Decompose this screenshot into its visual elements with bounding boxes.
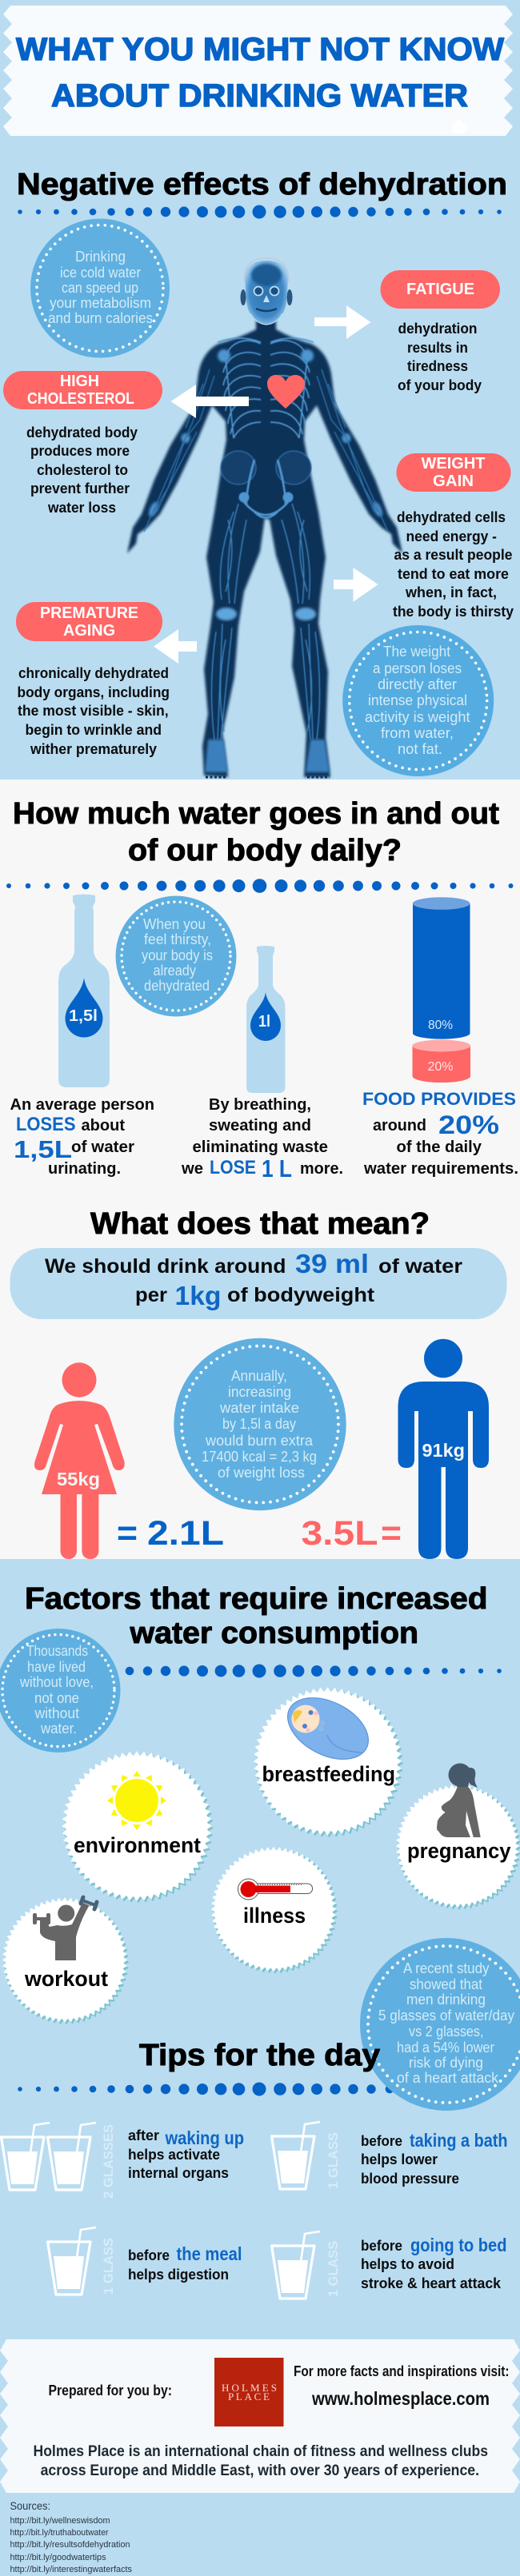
- pill: premature aging: AGING: [63, 622, 115, 640]
- white section background: [0, 780, 520, 1559]
- text: high cholesterol: water loss: [47, 500, 116, 516]
- text: 1 l breathing: eliminating waste: [192, 1138, 328, 1156]
- text: 1 l breathing: we: [181, 1160, 203, 1178]
- tip: taking a bath: 1 GLASS: [326, 2132, 341, 2189]
- factor: breastfeeding: breastfeeding: [262, 1762, 395, 1786]
- footer banner: Prepared for you by:: [48, 2383, 172, 2399]
- callout: ice cold water: [30, 219, 170, 358]
- stat: 3.5 l: 3.5L: [301, 1514, 378, 1553]
- spine: [262, 326, 269, 477]
- stat: 3.5 l: [301, 1513, 402, 1553]
- arrow: to premature aging: [154, 629, 197, 664]
- arrow: to high cholesterol: [171, 385, 249, 418]
- pill: high cholesterol: CHOLESTEROL: [27, 390, 134, 408]
- callout: recent study: showed that: [410, 1976, 482, 1992]
- callout: annual burn: increasing: [228, 1384, 291, 1400]
- dotted divider 1: [18, 205, 502, 219]
- icon: small bottle 1 l: [246, 946, 285, 1093]
- panel: 39 ml per kg: of bodyweight: [227, 1284, 375, 1306]
- dotted divider 4: [18, 2082, 502, 2096]
- factor: breastfeeding: [238, 1673, 418, 1852]
- text: food provides: FOOD PROVIDES: [362, 1089, 516, 1109]
- text: 1.5 l urinating: [10, 1096, 154, 1178]
- tip: going to bed: stroke & heart attack: [361, 2275, 502, 2291]
- callout: weight from water: not fat.: [398, 741, 442, 757]
- icon: woman 55 kg: 55kg: [57, 1469, 100, 1489]
- tip: going to bed: going to bed: [410, 2235, 507, 2255]
- text: 1 l breathing: sweating and: [209, 1117, 311, 1134]
- text: food provides: of the daily: [397, 1138, 482, 1156]
- tip: taking a bath: [272, 2122, 507, 2189]
- x-ray human body: [127, 258, 402, 777]
- leg bones and veins: [211, 504, 320, 740]
- factor: workout: [0, 1885, 142, 2037]
- text: 1.5 l urinating: about: [82, 1117, 125, 1134]
- icon: glass: [272, 2122, 320, 2189]
- factor: illness: [198, 1834, 350, 1986]
- icon: person lifting dumbbells: [33, 1897, 98, 1960]
- text: weight gain: as a result people: [394, 547, 512, 563]
- callout: recent study: 5 glasses of water/day: [378, 2008, 514, 2024]
- callout: thirsty: your body is: [142, 947, 213, 963]
- callout: recent study: men drinking: [406, 1992, 486, 2008]
- callout: recent study: risk of dying: [409, 2055, 483, 2071]
- tip: before the meal: helps digestion: [128, 2267, 229, 2283]
- callout: ice cold water: ice cold water: [60, 265, 141, 281]
- heading: factors: [25, 1582, 488, 1650]
- text: high cholesterol: cholesterol to: [37, 462, 128, 478]
- text: premature aging: the most visible - skin,: [18, 703, 169, 719]
- text: 1.5 l urinating: urinating.: [48, 1160, 121, 1178]
- icon: man 91 kg: [398, 1339, 489, 1559]
- tip: going to bed: 1 GLASS: [326, 2241, 341, 2297]
- callout: thousands without love: without: [34, 1705, 79, 1721]
- text: 1 l breathing: 1 L: [262, 1154, 292, 1182]
- text: 1 l breathing: LOSE: [210, 1157, 256, 1178]
- body silhouette: [127, 320, 402, 777]
- title banner: WHAT YOU MIGHT NOT KNOW: [16, 32, 504, 67]
- tip: taking a bath: before: [361, 2133, 402, 2149]
- callout: ice cold water: can speed up: [62, 280, 138, 296]
- callout: thousands without love: not one: [34, 1690, 79, 1706]
- arm veins: [144, 369, 388, 532]
- text: premature aging: begin to wrinkle and: [26, 722, 162, 738]
- stat: 2.1 l: =: [117, 1513, 138, 1553]
- callout: annual burn: 17400 kcal = 2,3 kg: [202, 1449, 317, 1465]
- heading: how much water: How much water goes in and out: [13, 797, 499, 831]
- tip: waking up: helps activate: [128, 2147, 220, 2163]
- panel: 39 ml per kg: We should drink around: [45, 1255, 286, 1278]
- heading: how much water: [13, 797, 499, 867]
- text: fatigue: of your body: [398, 377, 482, 393]
- icon: glass: [272, 2231, 320, 2299]
- icon: heart: [267, 375, 305, 409]
- callout: weight from water: [342, 625, 494, 776]
- tip: waking up: [2, 2123, 244, 2199]
- icon: large bottle 1.5 l: [58, 894, 110, 1087]
- tip: waking up: after: [128, 2127, 159, 2143]
- callout: thousands without love: Thousands: [26, 1643, 88, 1659]
- pill: premature aging: PREMATURE: [40, 604, 138, 622]
- icon: sun: [107, 1771, 166, 1830]
- text: 1 l breathing: By breathing,: [209, 1096, 311, 1114]
- callout: thirsty: already: [154, 963, 196, 979]
- text: weight gain: the body is thirsty: [393, 604, 514, 620]
- icon: two glasses: [2, 2123, 96, 2190]
- panel: 39 ml per kg: 1kg: [174, 1281, 221, 1310]
- pill: weight gain: GAIN: [433, 473, 474, 490]
- callout: recent study: had a 54% lower: [397, 2040, 494, 2056]
- chart: 80 / 20 cylinder: 20%: [427, 1060, 453, 1074]
- factor: pregnancy: [383, 1764, 520, 1922]
- text: 1.5 l urinating: An average person: [10, 1096, 154, 1114]
- callout: annual burn: water intake: [219, 1400, 299, 1416]
- logo: holmes place: [214, 2358, 283, 2426]
- text: high cholesterol: [26, 425, 138, 516]
- callout: annual burn: would burn extra: [205, 1433, 314, 1449]
- sources: http://bit.ly/goodwatertips: [10, 2553, 106, 2562]
- sources: http://bit.ly/resultsofdehydration: [10, 2540, 130, 2550]
- heading: factors: water consumption: [129, 1617, 418, 1650]
- title banner: [3, 6, 513, 136]
- callout: thousands without love: without love,: [19, 1674, 94, 1690]
- text: 1 l breathing: more.: [300, 1160, 343, 1178]
- callout: thirsty: dehydrated: [144, 978, 210, 994]
- sources: Sources:: [10, 2499, 50, 2512]
- callout: recent study: [360, 1938, 520, 2111]
- text: food provides: water requirements.: [363, 1160, 518, 1178]
- tip: before the meal: the meal: [176, 2243, 242, 2264]
- text: high cholesterol: prevent further: [30, 481, 130, 496]
- title banner: ABOUT DRINKING WATER: [51, 78, 468, 114]
- icon: man 91 kg: 91kg: [422, 1440, 465, 1461]
- heading: tips for the day: Tips for the day: [139, 2039, 380, 2072]
- dotted divider 3: [125, 1665, 502, 1677]
- tip: taking a bath: blood pressure: [361, 2171, 459, 2187]
- icon: swaddled baby: [278, 1685, 378, 1772]
- text: fatigue: results in: [407, 340, 468, 356]
- arrow: to fatigue: [314, 305, 371, 339]
- text: 1.5 l urinating: of water: [71, 1138, 134, 1156]
- callout: thousands without love: have lived: [27, 1659, 86, 1675]
- callout: annual burn: [174, 1338, 346, 1510]
- text: food provides: [362, 1089, 518, 1178]
- callout: weight from water: activity is weight: [365, 709, 470, 725]
- text: premature aging: body organs, including: [18, 684, 170, 700]
- text: fatigue: [398, 321, 482, 393]
- icon: woman 55 kg: [34, 1362, 125, 1559]
- icon: pregnant silhouette: [437, 1764, 481, 1837]
- callout: weight from water: a person loses: [373, 660, 462, 676]
- text: fatigue: dehydration: [398, 321, 477, 337]
- footer banner: [0, 2339, 520, 2493]
- sources: http://bit.ly/wellneswisdom: [10, 2516, 110, 2526]
- logo: holmes place: HOLMES: [222, 2382, 277, 2394]
- tip: taking a bath: taking a bath: [410, 2130, 507, 2151]
- sources: http://bit.ly/truthaboutwater: [10, 2528, 109, 2538]
- logo: holmes place: PLACE: [228, 2391, 270, 2403]
- text: food provides: 20%: [438, 1111, 499, 1139]
- text: 1.5 l urinating: LOSES: [16, 1114, 75, 1135]
- text: high cholesterol: dehydrated body: [26, 425, 138, 441]
- pill: premature aging: [16, 602, 162, 641]
- tip: waking up: 2 GLASSES: [101, 2124, 116, 2199]
- pill: high cholesterol: HIGH: [60, 373, 99, 390]
- text: high cholesterol: produces more: [30, 443, 130, 459]
- callout: annual burn: Annually,: [231, 1368, 287, 1384]
- heading: factors: Factors that require increased: [25, 1582, 488, 1616]
- callout: weight from water: intense physical: [368, 692, 467, 708]
- pill: weight gain: [397, 453, 510, 492]
- sources: http://bit.ly/interestingwaterfacts: [10, 2565, 132, 2574]
- factor: illness: illness: [243, 1904, 306, 1928]
- feet: [205, 740, 330, 772]
- tip: going to bed: helps to avoid: [361, 2256, 454, 2272]
- footer banner: www.holmesplace.com: [311, 2388, 490, 2409]
- heading: how much water: of our body daily?: [128, 834, 402, 867]
- pill: weight gain: WEIGHT: [421, 455, 485, 473]
- panel: 39 ml per kg: 39 ml: [295, 1249, 369, 1278]
- factor: environment: [46, 1736, 229, 1918]
- panel: 39 ml per kg: of water: [378, 1255, 462, 1278]
- footer banner: Holmes Place is an international chain of fitness and wellness clubs: [34, 2443, 488, 2460]
- text: fatigue: tiredness: [407, 358, 468, 374]
- callout: thousands without love: [0, 1629, 120, 1753]
- callout: recent study: A recent study: [403, 1960, 490, 1976]
- text: weight gain: need energy -: [406, 528, 497, 544]
- callout: weight from water: The weight: [383, 644, 450, 660]
- panel: 39 ml per kg: [10, 1248, 507, 1319]
- callout: ice cold water: your metabolism: [50, 295, 151, 311]
- callout: thirsty: feel thirsty,: [144, 931, 211, 947]
- text: food provides: around: [373, 1117, 426, 1134]
- text: premature aging: [18, 665, 170, 757]
- callout: thirsty: When you: [143, 916, 206, 932]
- arrow: to weight gain: [334, 568, 378, 602]
- icon: large bottle 1.5 l: 1,5l: [69, 1007, 98, 1025]
- text: premature aging: wither prematurely: [30, 741, 157, 757]
- heading: negative effects: Negative effects of dehydration: [17, 168, 507, 201]
- chart: 80 / 20 cylinder: [412, 897, 470, 1083]
- callout: thirsty: [115, 895, 237, 1017]
- stat: 2.1 l: 2.1L: [147, 1514, 224, 1553]
- dotted divider 2: [6, 879, 514, 893]
- callout: recent study: of a heart attack: [397, 2070, 499, 2086]
- pelvis: [221, 451, 311, 518]
- skull: [240, 258, 293, 325]
- tip: going to bed: [272, 2231, 507, 2299]
- callout: ice cold water: Drinking: [75, 249, 126, 265]
- pill: high cholesterol: [3, 371, 162, 409]
- tip: waking up: waking up: [165, 2127, 244, 2148]
- tip: going to bed: before: [361, 2238, 402, 2254]
- icon: small bottle 1 l: 1l: [258, 1013, 270, 1031]
- heading: what does that mean: What does that mean?: [90, 1207, 430, 1241]
- tip: waking up: internal organs: [128, 2165, 229, 2181]
- callout: ice cold water: and burn calories: [48, 310, 153, 326]
- pill: fatigue: FATIGUE: [406, 281, 474, 298]
- callout: thousands without love: water.: [40, 1721, 77, 1737]
- text: weight gain: tend to eat more: [398, 566, 509, 582]
- callout: weight from water: directly after: [378, 676, 457, 692]
- tip: before the meal: 1 GLASS: [101, 2238, 116, 2295]
- callout: weight from water: from water,: [381, 725, 454, 741]
- text: premature aging: chronically dehydrated: [18, 665, 169, 681]
- text: 1 l breathing: [181, 1096, 343, 1182]
- chart: 80 / 20 cylinder: 80%: [428, 1019, 453, 1032]
- knees: [216, 608, 316, 620]
- icon: glass: [48, 2227, 96, 2295]
- text: 1.5 l urinating: 1,5L: [14, 1135, 72, 1163]
- ribcage: [218, 338, 314, 438]
- text: weight gain: when, in fact,: [405, 584, 497, 600]
- tip: before the meal: before: [128, 2247, 170, 2263]
- stat: 3.5 l: =: [381, 1513, 402, 1553]
- text: weight gain: dehydrated cells: [397, 509, 506, 525]
- panel: 39 ml per kg: per: [135, 1284, 167, 1306]
- factor: environment: environment: [74, 1833, 201, 1857]
- pill: fatigue: [381, 270, 500, 309]
- callout: annual burn: of weight loss: [218, 1465, 305, 1481]
- text: weight gain: [393, 509, 514, 620]
- factor: pregnancy: pregnancy: [407, 1839, 510, 1863]
- stat: 2.1 l: [117, 1513, 224, 1553]
- footer banner: across Europe and Middle East, with over 30 years of experience.: [41, 2462, 479, 2479]
- factor: workout: workout: [24, 1967, 108, 1991]
- tip: before the meal: [48, 2227, 242, 2295]
- icon: thermometer: [238, 1879, 312, 1900]
- shoulder joints and elbows: [147, 349, 384, 518]
- tip: taking a bath: helps lower: [361, 2151, 438, 2167]
- callout: annual burn: by 1,5l a day: [222, 1416, 296, 1432]
- callout: recent study: vs 2 glasses,: [409, 2024, 483, 2040]
- sources: [10, 2499, 132, 2574]
